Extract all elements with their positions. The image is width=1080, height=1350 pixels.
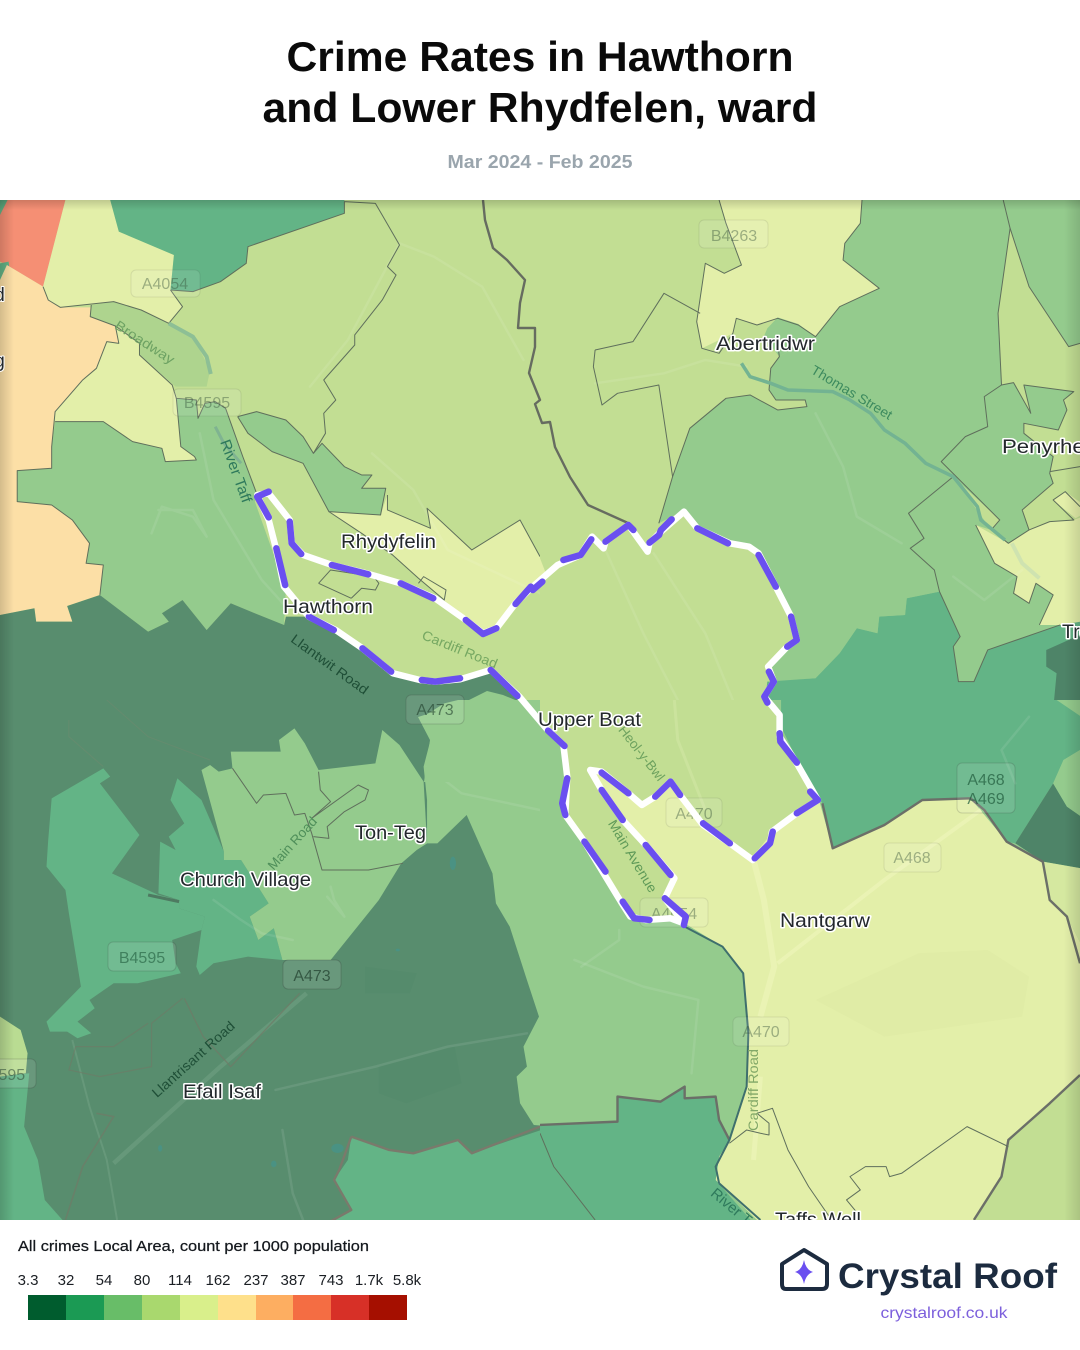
choropleth map [0, 200, 1080, 1239]
label: Main Avenue: Main Avenue [605, 817, 660, 895]
shield: B4263: B4263 [711, 228, 757, 245]
legend colour ramp [28, 1295, 407, 1320]
map quadrant: north-east regions [540, 200, 1080, 710]
map quadrant: north-west regions [0, 200, 551, 720]
ward outline purple dashes [257, 492, 818, 925]
shield: B4595 west edge [0, 1059, 36, 1088]
district boundary line [483, 200, 628, 523]
map quadrant: south-west regions [0, 700, 551, 1223]
place: Abertridwr: Abertridwr [716, 333, 816, 355]
place: Ton-Teg: Ton-Teg [355, 822, 426, 844]
label: River Taff: River Taff [216, 437, 255, 506]
shield: A470 centre [666, 798, 722, 827]
shield: A468 A469: A468 [967, 772, 1005, 789]
legend [18, 1238, 422, 1320]
logo: Crystal Roof [782, 1250, 1057, 1322]
region: mid-green hump beneath the A473 [418, 691, 515, 782]
shield: A468: A468 [893, 850, 931, 867]
logo wordmark: Crystal Roof [838, 1257, 1057, 1296]
place: Hawthorn: Hawthorn [283, 596, 373, 618]
legend title: All crimes Local Area, count per 1000 population [18, 1238, 369, 1255]
shield: A470 south [733, 1017, 789, 1046]
shield: A470 south: A470 [742, 1024, 780, 1041]
ward boundary: Hawthorn and Lower Rhydfelen [257, 492, 818, 925]
legend scale values: 32 [58, 1272, 74, 1289]
shield: B4595 south [108, 942, 176, 971]
ward outline white [257, 493, 818, 923]
place: Upper Boat: Upper Boat [538, 709, 642, 731]
shield: A4054 south: A4054 [651, 906, 697, 923]
map edge vignette [0, 200, 1080, 1220]
legend scale values: 3.3 [18, 1272, 38, 1289]
road shields [0, 220, 1015, 1088]
place labels [0, 284, 1080, 1231]
legend scale values: 80 [134, 1272, 150, 1289]
shield: A4054 south [640, 898, 708, 927]
legend scale values [18, 1272, 422, 1289]
shield: A473 south: A473 [293, 968, 331, 985]
place: Nantgarw: Nantgarw [780, 910, 871, 932]
shield: B4595 north: B4595 [184, 395, 230, 412]
label: Cardiff Road north: Cardiff Road [420, 628, 500, 671]
title: Crime Rates in Hawthorn [286, 33, 794, 80]
place: Efail Isaf: Efail Isaf [183, 1081, 262, 1103]
shield: A468 [884, 843, 941, 872]
label: Broadway: Broadway [112, 318, 178, 367]
place: Taffs Well: Taffs Well [775, 1209, 861, 1231]
label: Heol-y-Bwl: Heol-y-Bwl [615, 723, 668, 784]
map quadrant: south-east regions [540, 700, 1080, 1223]
title [262, 33, 818, 131]
shield: A4054 north: A4054 [142, 276, 188, 293]
road and river labels [112, 318, 895, 1239]
shield: A468 A469 [957, 763, 1015, 813]
shield: B4263 [699, 220, 768, 248]
icon: house with star [782, 1250, 827, 1289]
shield: B4595 south: B4595 [119, 950, 165, 967]
legend scale values: 743 [318, 1272, 344, 1289]
legend scale values: 1.7k [355, 1272, 384, 1289]
shield: A468 A469: A469 [967, 791, 1005, 808]
logo url: crystalroof.co.uk [880, 1305, 1009, 1322]
place: Rhydyfelin: Rhydyfelin [341, 531, 436, 553]
shield: A473 centre [406, 695, 464, 724]
shield: B4595 north [173, 389, 241, 416]
subtitle: date range: Mar 2024 - Feb 2025 [448, 152, 632, 172]
label: Thomas Street: Thomas Street [808, 362, 895, 423]
shield: A473 centre: A473 [416, 702, 454, 719]
label: Llantwit Road: Llantwit Road [288, 631, 371, 698]
place: Church Village: Church Village [180, 869, 311, 891]
shield: A4054 north [131, 270, 200, 297]
legend scale values: 162 [205, 1272, 231, 1289]
shield: A473 south [283, 960, 341, 989]
label: Main Road: Main Road [265, 814, 320, 873]
legend scale values: 387 [280, 1272, 306, 1289]
title: and Lower Rhydfelen, ward [262, 84, 818, 131]
legend scale values: 5.8k [393, 1272, 422, 1289]
label: River Taff south: River Taff [707, 1185, 767, 1239]
legend scale values: 114 [168, 1272, 192, 1289]
label: Llantrisant Road: Llantrisant Road [149, 1018, 238, 1100]
legend scale values: 54 [96, 1272, 112, 1289]
shield: A470 centre: A470 [675, 806, 713, 823]
label: Cardiff Road south: Cardiff Road [746, 1049, 761, 1131]
legend scale values: 237 [243, 1272, 269, 1289]
